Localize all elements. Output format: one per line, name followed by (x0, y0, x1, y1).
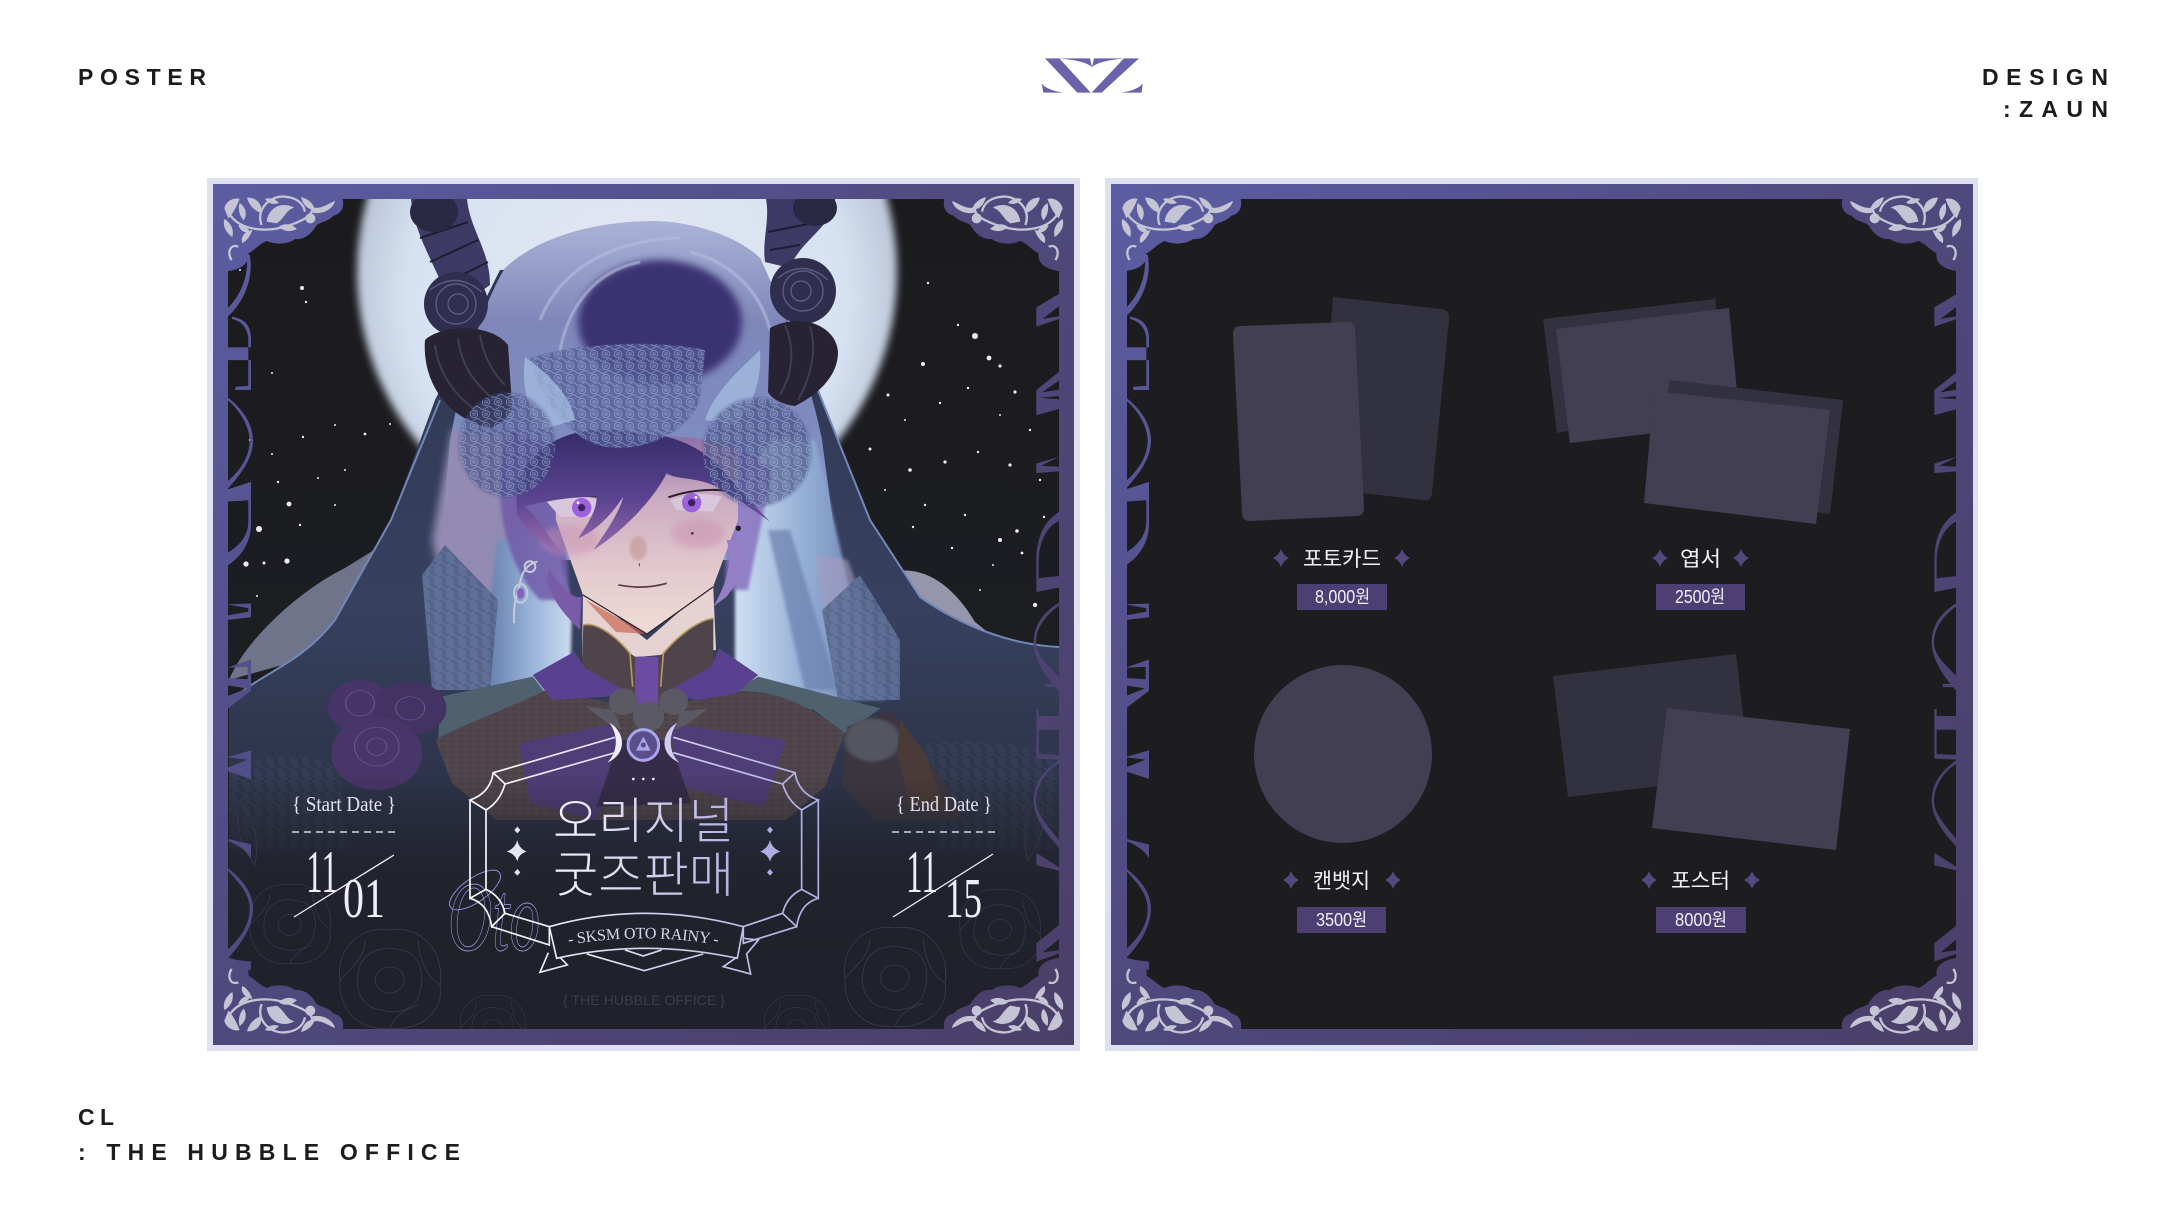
dark hair crown (578, 260, 742, 384)
hair sheen (540, 238, 770, 350)
corner filigree (1122, 197, 1961, 1032)
face (552, 436, 738, 634)
label (1273, 548, 1410, 571)
price: 3500원 (1316, 910, 1367, 930)
under-jaw shadow (586, 600, 647, 634)
label: 엽서 (1680, 548, 1721, 571)
client credit (78, 1104, 460, 1165)
ribbon text: - SKSM OTO RAINY - (568, 928, 718, 943)
price (1297, 907, 1386, 933)
script signature (444, 861, 540, 972)
label: 캔뱃지 (1313, 870, 1370, 893)
panel: poster artwork (207, 178, 1080, 1051)
label (1641, 870, 1760, 893)
title (553, 795, 734, 903)
veil light panels (422, 430, 900, 700)
start date: { Start Date } (292, 792, 396, 816)
item: can badge (1254, 665, 1432, 933)
veil dome over head (440, 221, 838, 560)
end date: 15 (945, 868, 982, 930)
client credit: CL (78, 1104, 114, 1130)
label (1283, 870, 1401, 893)
price (1656, 584, 1745, 610)
price (1656, 907, 1746, 933)
cloak shoulders (230, 550, 986, 678)
dark lower fade (229, 788, 1059, 994)
side hair behind face (500, 430, 772, 600)
end date (892, 792, 996, 930)
neck (582, 582, 716, 662)
end date: 11 (906, 839, 938, 905)
start date: 01 (343, 868, 385, 930)
jaw line (583, 587, 713, 634)
emblem (607, 723, 679, 763)
item: postcard (1543, 299, 1843, 610)
item: photo card (1233, 297, 1449, 610)
veil outer navy drape (229, 258, 1059, 863)
dark panel field (1127, 199, 1956, 1029)
lace hem (230, 741, 1059, 810)
heading: poster: POSTER (78, 64, 206, 90)
lace crown (459, 344, 811, 506)
price: 8,000원 (1315, 587, 1370, 607)
title: 오리지널 (553, 795, 734, 849)
client credit: : THE HUBBLE OFFICE (78, 1139, 460, 1165)
illustration: moon night character (228, 199, 1059, 1029)
bodice, scarf and roses (328, 648, 964, 820)
title plate (468, 722, 820, 976)
start date (292, 792, 396, 930)
corner filigree (224, 197, 1063, 1032)
heading: design credit: :ZAUN (2003, 96, 2108, 122)
price: 2500원 (1675, 587, 1725, 607)
panel: goods list (1105, 178, 1978, 1051)
start date: 11 (306, 839, 338, 905)
label: 포토카드 (1303, 548, 1381, 571)
footer credit on poster: { THE HUBBLE OFFICE } (563, 992, 725, 1008)
plate dots and sparkles (507, 778, 781, 876)
logo: monogram SZ (1042, 58, 1143, 93)
stars (239, 269, 1046, 607)
heading: design credit (1982, 64, 2108, 122)
price (1297, 584, 1387, 610)
veil edge highlights (229, 383, 1059, 702)
title: 굿즈판매 (553, 849, 734, 903)
price: 8000원 (1675, 910, 1727, 930)
heading: design credit: DESIGN (1982, 64, 2108, 90)
end date: { End Date } (896, 792, 992, 816)
rose line art (238, 790, 1043, 1060)
horns and roses (410, 190, 838, 428)
script signature: Oto (448, 861, 540, 972)
item: poster (1553, 654, 1850, 933)
label: 포스터 (1671, 870, 1730, 893)
label (1652, 548, 1749, 571)
facial features and hair (514, 430, 770, 720)
